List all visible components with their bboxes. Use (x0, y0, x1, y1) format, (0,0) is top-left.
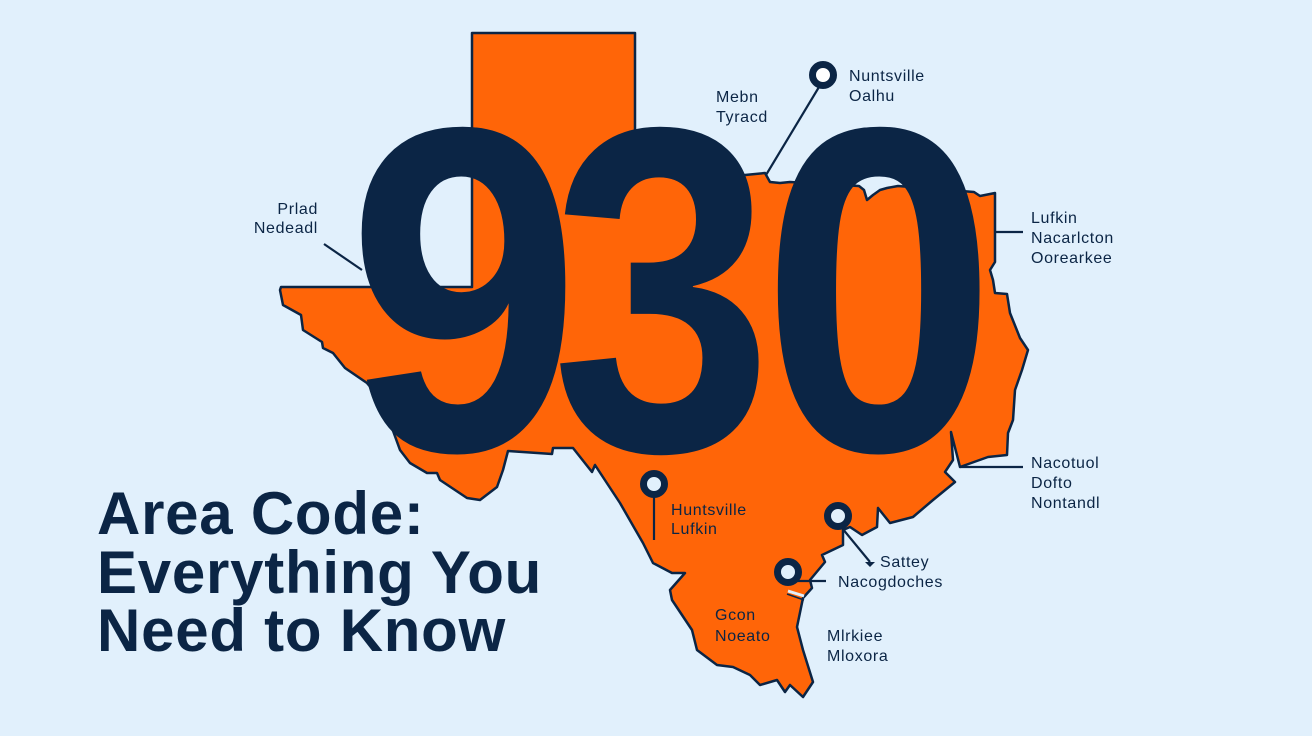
big number 930 (347, 31, 997, 549)
big number 930: 3 (551, 31, 773, 549)
label: Mlrkiee Mloxora (827, 628, 888, 665)
title: Need to Know (97, 597, 506, 664)
pin: Sattey (828, 506, 929, 571)
pin: Nuntsville: Nuntsville (849, 68, 925, 85)
big number 930: 0 (761, 32, 997, 549)
map label: Gcon Noeato: Gcon (715, 607, 756, 624)
callout: Pried Nedeadl: Prlad (277, 201, 318, 218)
map label: Gcon Noeato: Noeato (715, 628, 770, 645)
pin: Nuntsville: Oalhu (849, 88, 895, 105)
callout: Lufkin: Lufkin (1031, 210, 1078, 227)
pin: Sattey: Sattey (880, 554, 929, 571)
pin: Huntsville Lufkin: Huntsville (671, 502, 747, 519)
callout: Mebn Tyracd: Tyracd (716, 109, 768, 126)
map label: Gcon Noeato (715, 607, 770, 645)
callout: Pried Nedeadl: Nedeadl (254, 220, 318, 237)
callout: Nacotuol: Nacotuol (1031, 455, 1099, 472)
callout: Lufkin: Nacarlcton (1031, 230, 1114, 247)
label: Mlrkiee Mloxora: Mloxora (827, 648, 888, 665)
callout: Lufkin: Oorearkee (1031, 250, 1112, 267)
callout: Nacotuol: Nontandl (1031, 495, 1100, 512)
map: Texas silhouette (280, 33, 1028, 697)
callout: Nacotuol (960, 455, 1100, 512)
pin: Nacogdoches (778, 562, 943, 600)
pin: Nacogdoches: Nacogdoches (838, 574, 943, 591)
pin: Huntsville Lufkin (644, 474, 747, 540)
label: Mlrkiee Mloxora: Mlrkiee (827, 628, 883, 645)
callout: Lufkin (996, 210, 1114, 267)
callout: Mebn Tyracd: Mebn (716, 89, 759, 106)
callout: Mebn Tyracd (716, 89, 768, 126)
callout: Nacotuol: Dofto (1031, 475, 1072, 492)
callout: Pried Nedeadl (254, 201, 362, 270)
title: Area Code: (97, 480, 425, 547)
pin: Nuntsville (766, 64, 925, 175)
title (97, 480, 542, 664)
pin: Huntsville Lufkin: Lufkin (671, 521, 718, 538)
big number 930: 9 (347, 31, 581, 548)
title: Everything You (97, 539, 542, 606)
